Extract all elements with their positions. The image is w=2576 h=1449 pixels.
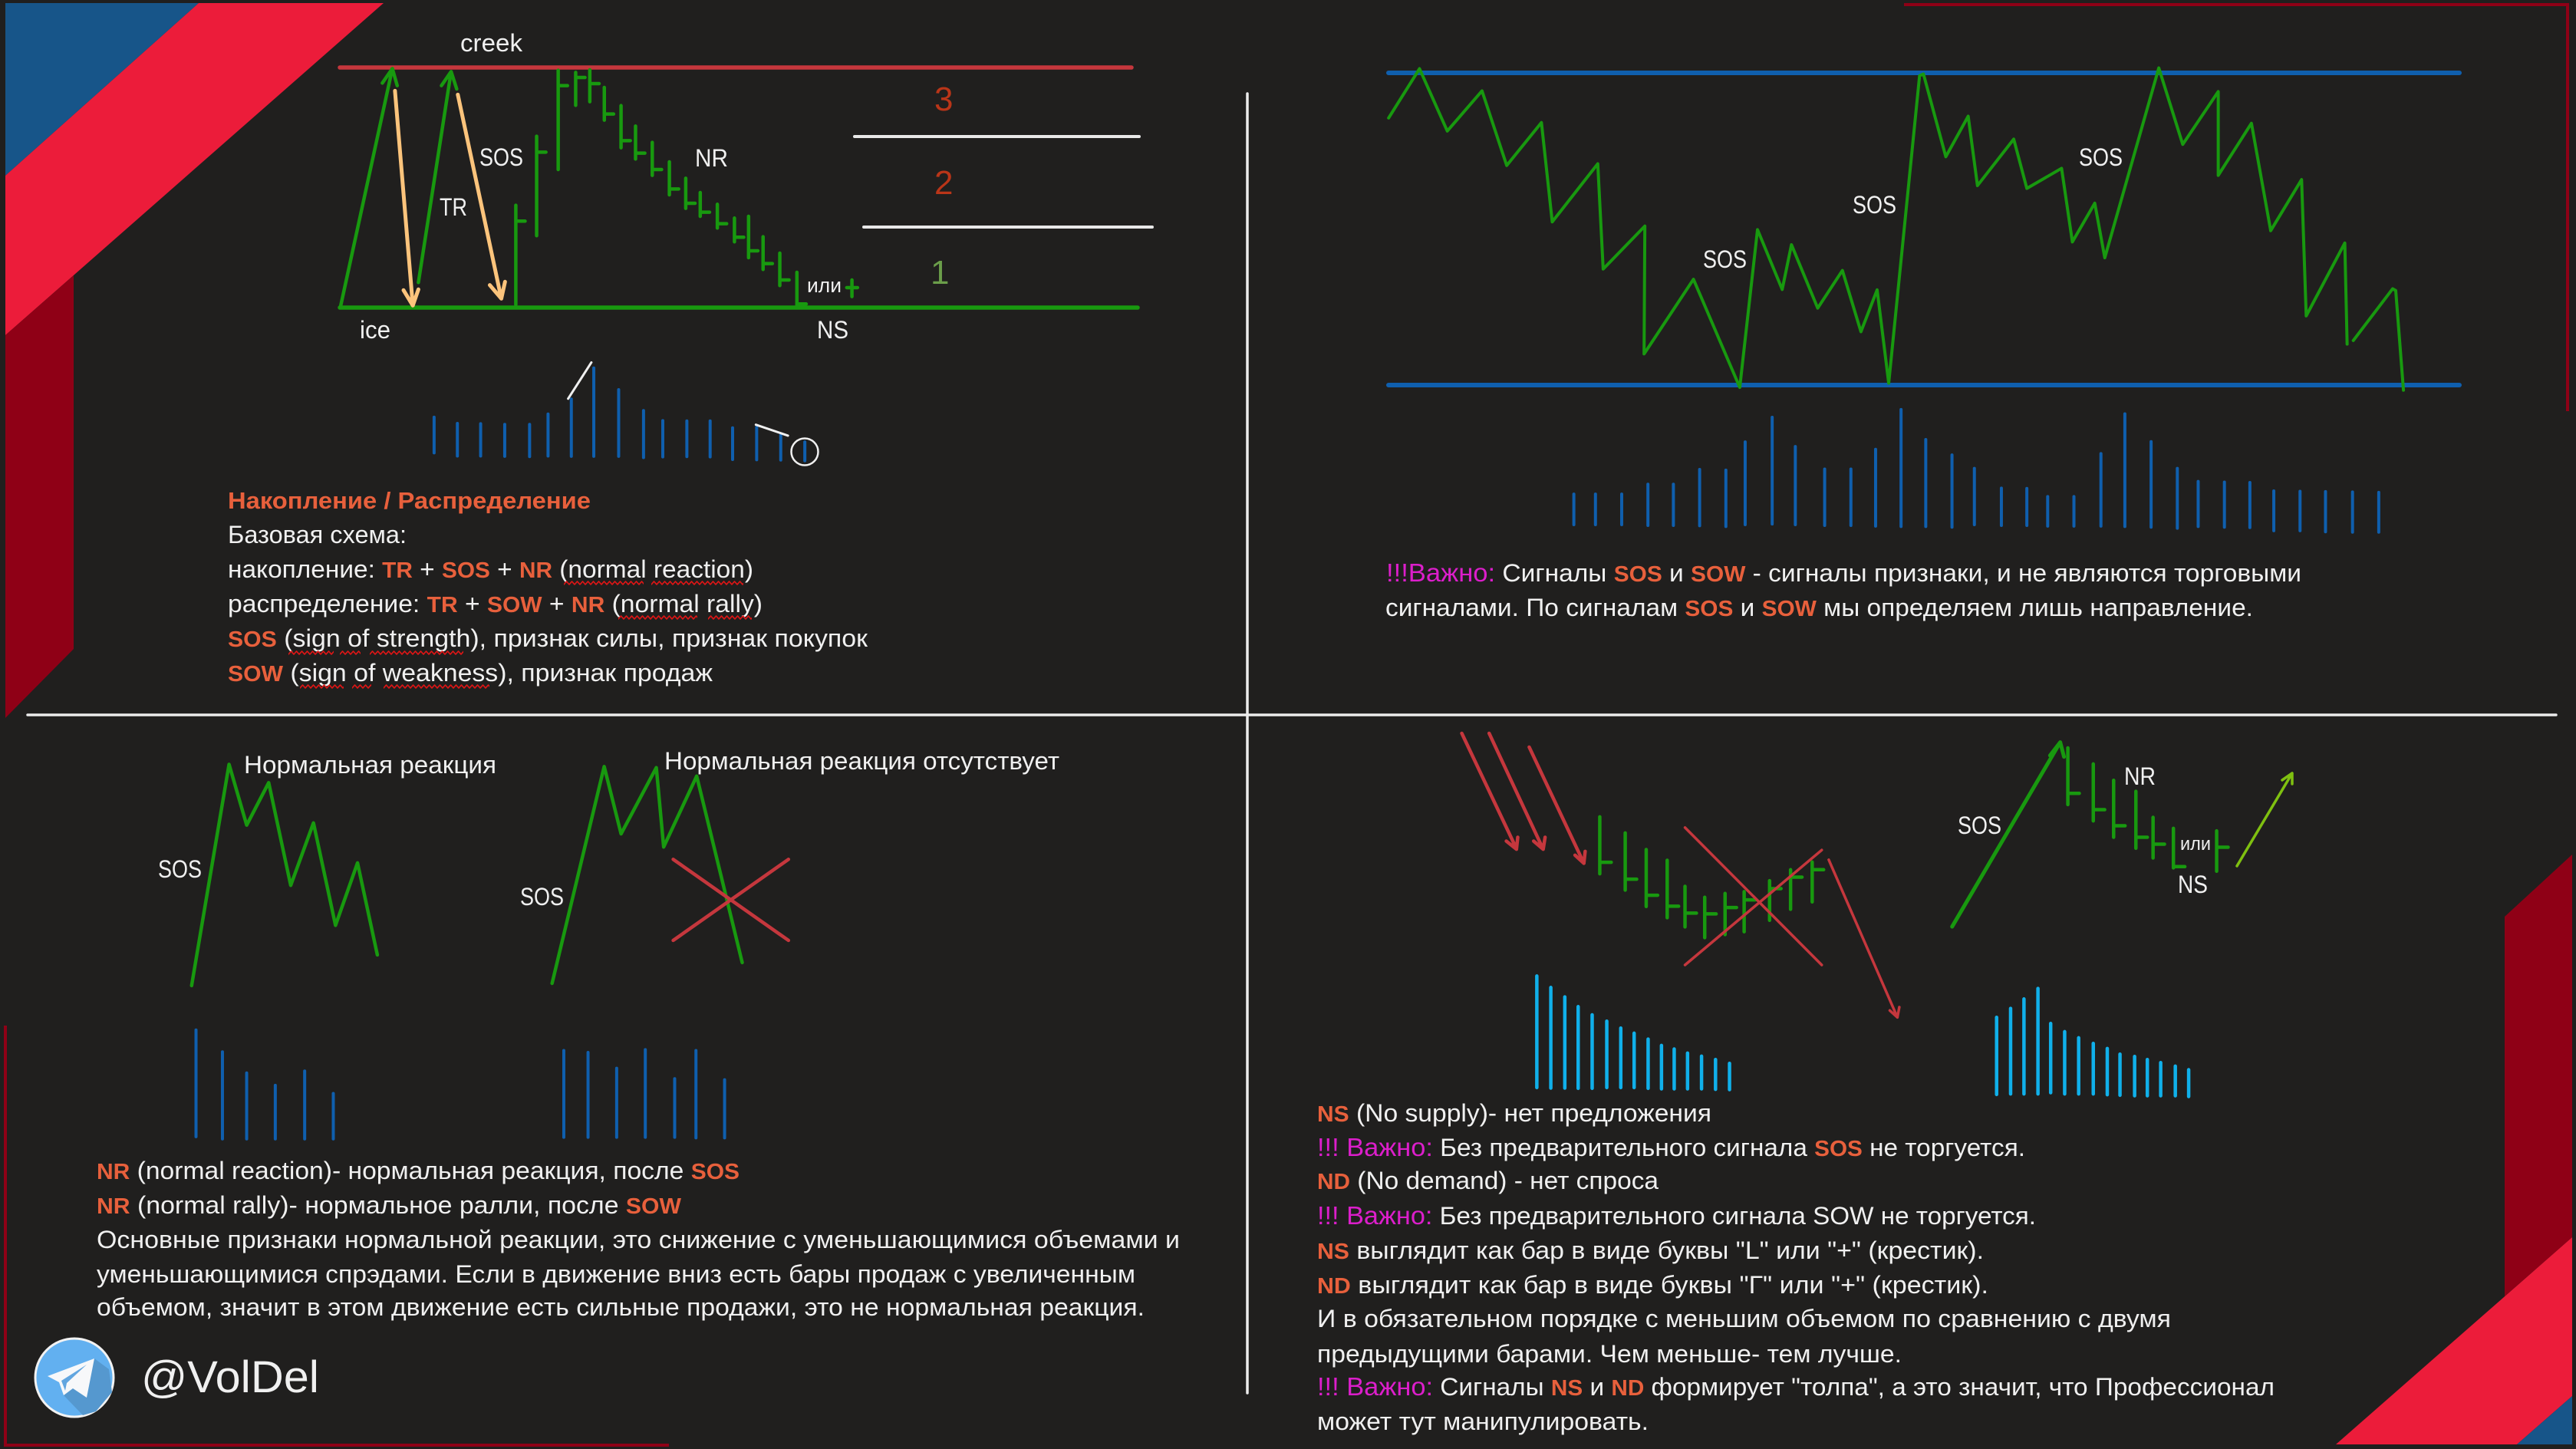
decoration: top-right red frame [1904, 5, 2568, 411]
creek line [340, 65, 1132, 70]
heading: Накопление / Распределение [228, 487, 591, 514]
text block: important note [1385, 558, 2301, 621]
line 7: И в обязательном порядке с меньшим объемом по сравнению с двумя [1317, 1305, 2171, 1332]
line 5: объемом, значит в этом движение есть сильные продажи, это не нормальная реакция. [97, 1293, 1145, 1321]
label: normal reaction absent: Нормальная реакция отсутствует [664, 747, 1059, 775]
level separators [855, 137, 1152, 227]
line 3: Основные признаки нормальной реакции, это снижение с уменьшающимися объемами и [97, 1226, 1180, 1253]
line 1: NS (No supply)- нет предложения [1317, 1099, 1711, 1127]
line: SOS definition: SOS (sign of strength), признак силы, признак покупок [228, 624, 868, 652]
line 2: !!! Важно: Без предварительного сигнала SOS не торгуется. [1317, 1133, 2025, 1161]
decoration: bottom-left red frame [5, 1026, 669, 1445]
line 1: !!!Важно: Сигналы SOS и SOW - сигналы признаки, и не являются торговыми [1386, 558, 2301, 587]
label: SOS: SOS [1958, 812, 2001, 839]
chart: price in range [1388, 68, 2459, 390]
handle: @VolDel [141, 1352, 319, 1402]
label: or: или [2180, 834, 2211, 855]
price line [1388, 68, 2403, 390]
number 3: 3 [934, 81, 953, 118]
icon: telegram [35, 1339, 114, 1417]
label: or: или [807, 274, 842, 297]
sell arrows [1462, 733, 1585, 863]
label: normal reaction: Нормальная реакция [244, 751, 496, 779]
chart: volume bars [434, 362, 818, 465]
line 8: предыдущими барами. Чем меньше- тем лучше. [1317, 1340, 1902, 1368]
divider: vertical [1246, 94, 1249, 1393]
panel: SOS signals in range [1385, 68, 2459, 621]
chart: ND without preceding signal [1462, 733, 1899, 1090]
chart: normal reaction absent [520, 747, 1059, 1138]
label: creek: creek [460, 29, 523, 57]
label: ice: ice [360, 316, 390, 344]
chart: NS after SOS [1952, 743, 2292, 1097]
line 4: !!! Важно: Без предварительного сигнала SOW не торгуется. [1317, 1201, 2036, 1230]
line: distribution: распределение: TR + SOW + NR (normal rally) [228, 590, 763, 617]
number 1: 1 [931, 254, 949, 291]
label: NR: NR [2124, 762, 2156, 790]
divider: horizontal [28, 713, 2556, 716]
label: NS: NS [817, 316, 848, 344]
label: TR: TR [440, 193, 467, 221]
line 9: !!! Важно: Сигналы NS и ND формирует "толпа", а это значит, что Профессионал [1317, 1372, 2275, 1401]
price bars [2068, 748, 2228, 871]
chart: base scheme with creek and ice [340, 29, 1152, 344]
label: NS: NS [2178, 871, 2208, 898]
range boundaries [1388, 73, 2459, 385]
line 1: NR (normal reaction)- нормальная реакция, после SOS [97, 1157, 740, 1184]
text block: NR description [97, 1157, 1180, 1321]
line 5: NS выглядит как бар в виде буквы "L" или "+" (крестик). [1317, 1237, 1984, 1264]
volume bars [196, 1030, 333, 1139]
text block: accumulation and distribution [228, 487, 868, 689]
price bars [1599, 817, 1823, 937]
line 6: ND выглядит как бар в виде буквы "Г" или "+" (крестик). [1317, 1271, 1988, 1299]
panel: normal reaction [35, 747, 1180, 1417]
volume bars [1537, 976, 1730, 1090]
volume bars [564, 1049, 725, 1138]
line 2: сигналами. По сигналам SOS и SOW мы определяем лишь направление. [1385, 594, 2253, 621]
spell-check underlines [288, 581, 752, 689]
chart: volume bars [1574, 410, 2379, 532]
label: SOS 2: SOS [1853, 191, 1896, 219]
line: accumulation: накопление: TR + SOS + NR (normal reaction) [228, 555, 753, 583]
line 4: уменьшающимися спрэдами. Если в движение вниз есть бары продаж с увеличенным [97, 1260, 1135, 1288]
label: SOS: SOS [520, 883, 564, 911]
line: SOW definition: SOW (sign of weakness), признак продаж [228, 659, 713, 687]
panel: NS and ND [1317, 733, 2292, 1435]
line 2: NR (normal rally)- нормальное ралли, после SOW [97, 1191, 681, 1219]
label: SOS 3: SOS [2079, 143, 2123, 171]
line 10: может тут манипулировать. [1317, 1408, 1649, 1435]
label: SOS 1: SOS [1703, 245, 1747, 273]
down arrow [1829, 860, 1899, 1017]
label: SOS: SOS [158, 855, 202, 883]
number 2: 2 [934, 164, 953, 202]
text block: NS and ND description [1317, 1099, 2275, 1435]
decoration: top-left corner ribbon [5, 3, 384, 718]
red cross [1685, 828, 1822, 965]
line: base scheme: Базовая схема: [228, 521, 407, 548]
SOS arrow [1952, 743, 2064, 927]
label: NR: NR [695, 144, 728, 172]
price bars: SOS and NR [516, 70, 858, 305]
red cross [674, 859, 789, 940]
panel: accumulation / distribution scheme [228, 29, 1152, 689]
chart: normal reaction present [158, 751, 496, 1139]
decoration: bottom-right corner ribbon [2336, 855, 2572, 1444]
continuation arrow [2237, 773, 2292, 866]
volume bars [1997, 989, 2189, 1097]
ice line [340, 305, 1138, 310]
arrows: trading range [341, 68, 505, 308]
label: SOS: SOS [479, 143, 523, 171]
line 3: ND (No demand) - нет спроса [1317, 1167, 1659, 1194]
